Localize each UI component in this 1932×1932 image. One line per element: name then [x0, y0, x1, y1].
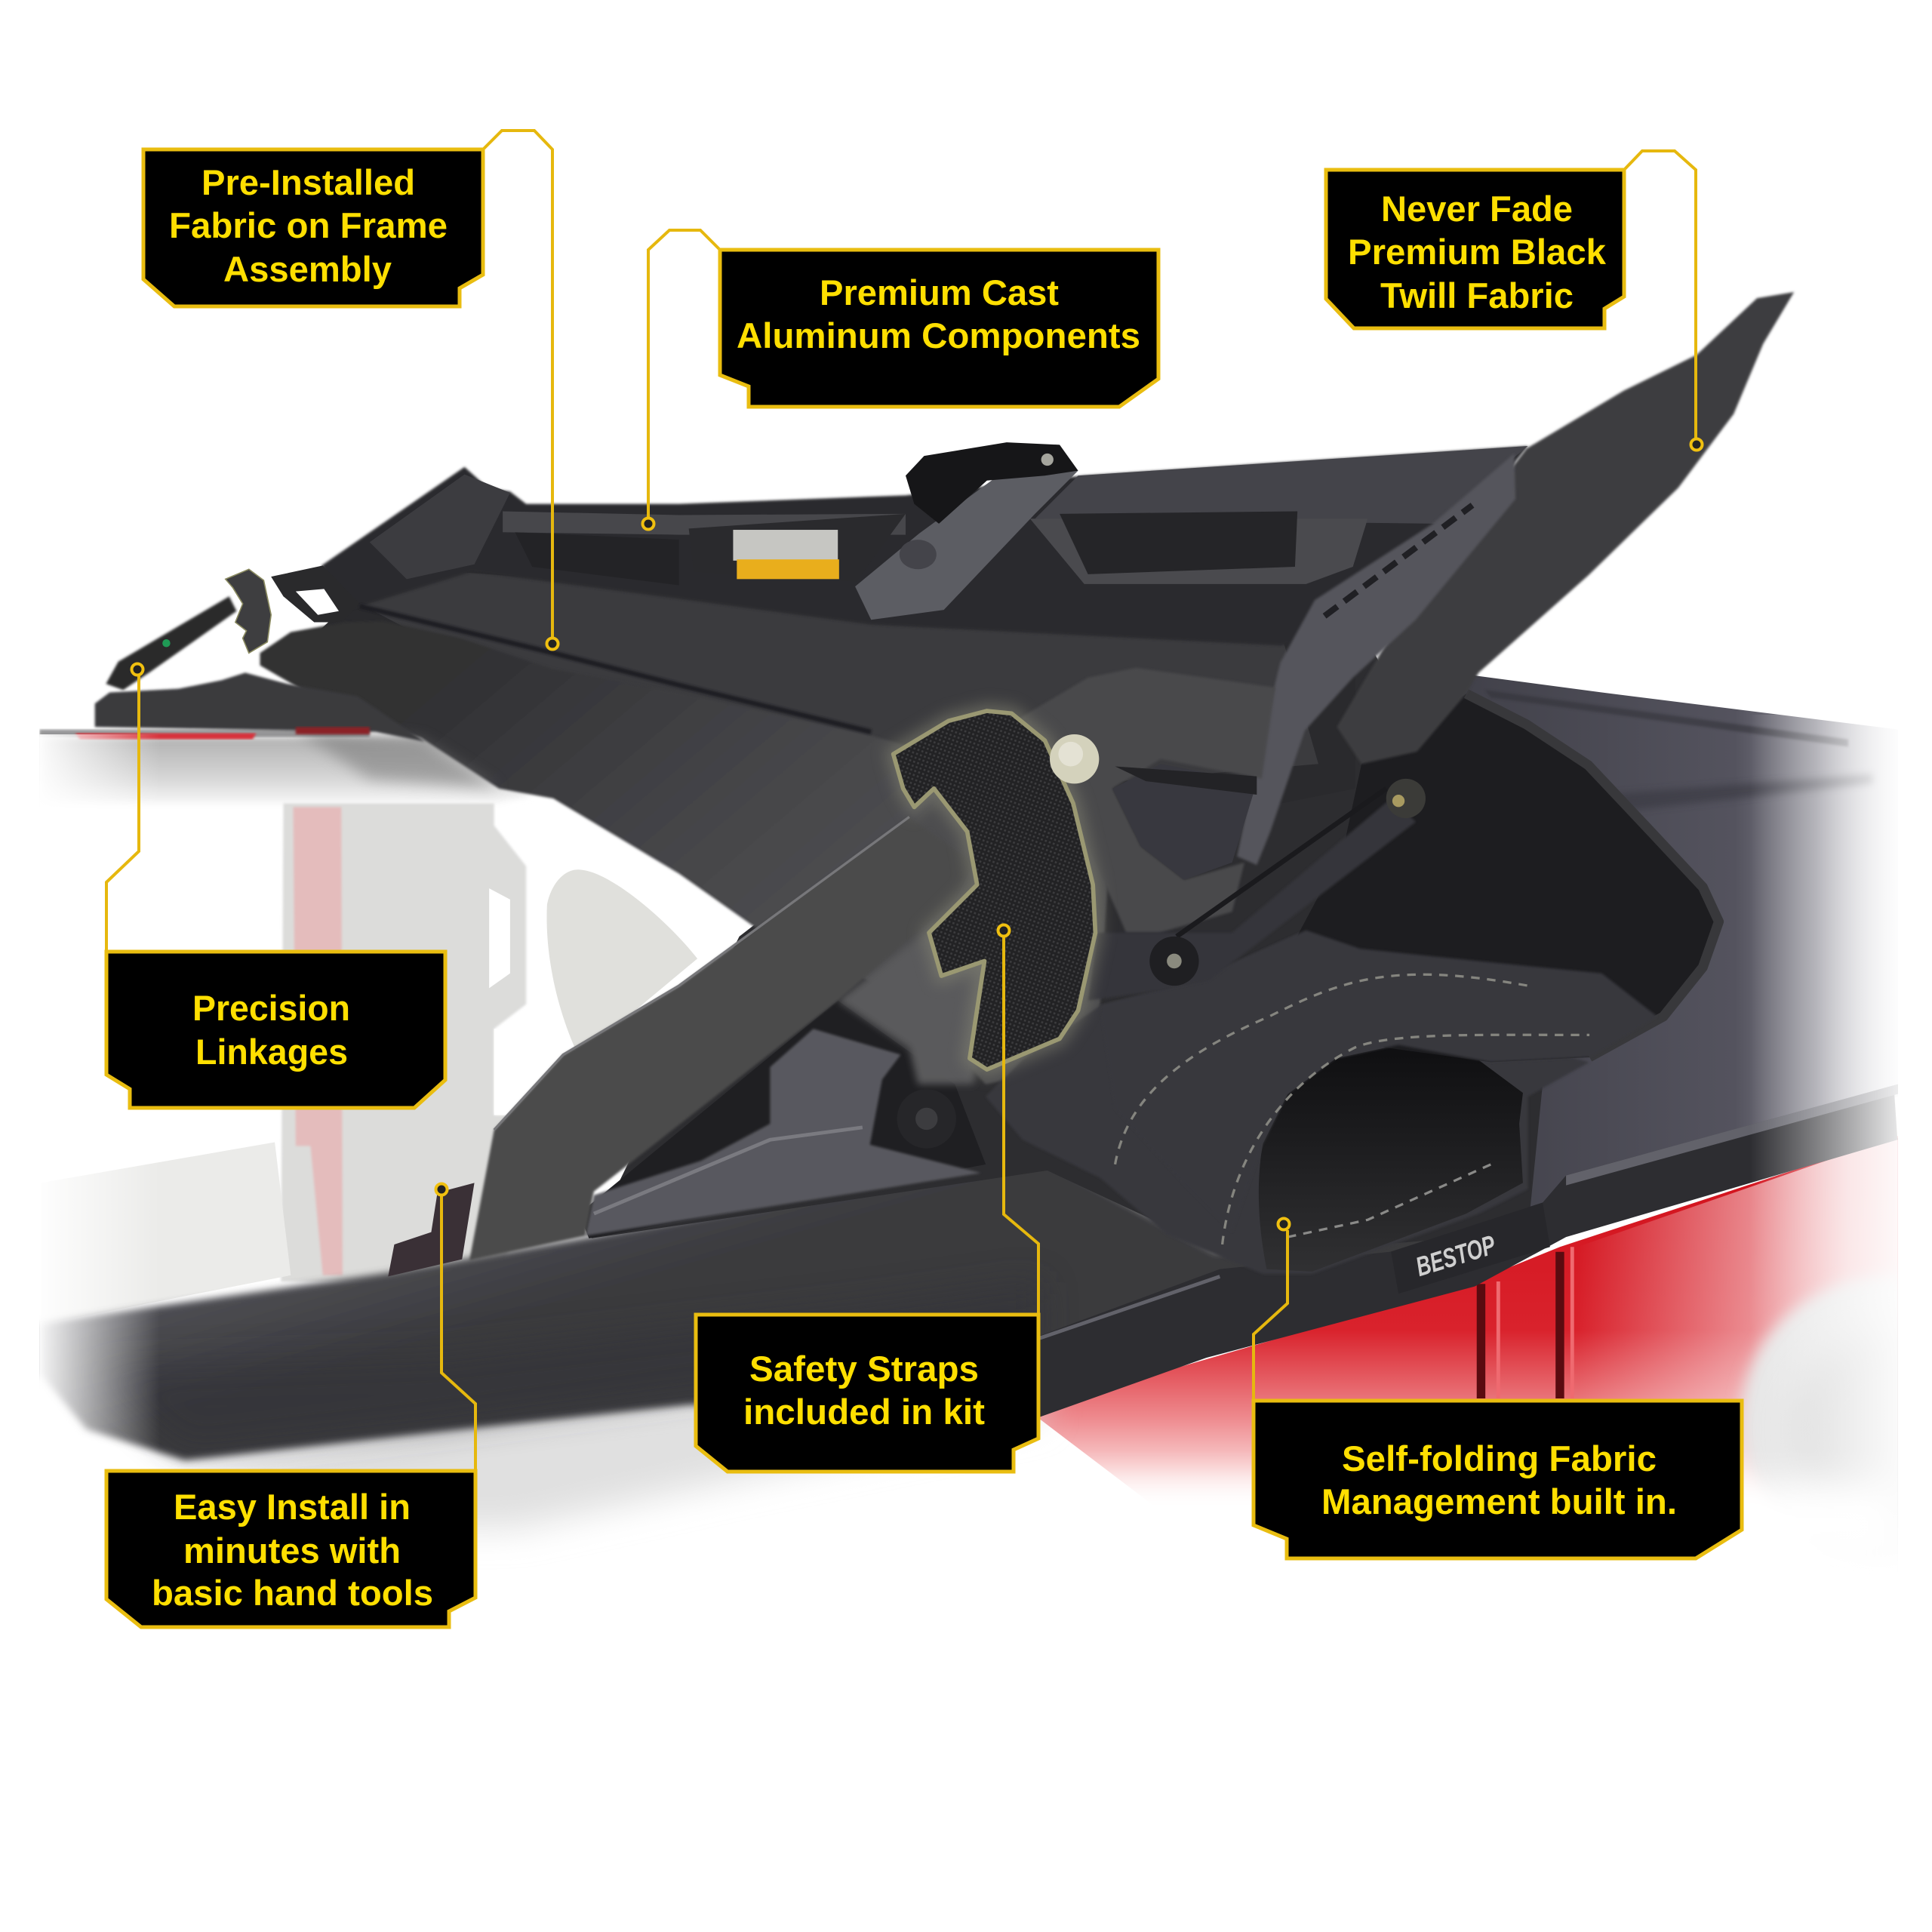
callout: Premium Cast Aluminum Components	[643, 230, 1158, 530]
leader dot	[643, 518, 654, 530]
product label	[733, 530, 839, 579]
red body panels	[1040, 1136, 1897, 1549]
label text	[1348, 189, 1607, 315]
leader dot	[1690, 439, 1703, 450]
label text: Management built in.	[1321, 1481, 1677, 1521]
label box	[143, 149, 483, 306]
side rail	[39, 1155, 1540, 1460]
photo: soft top on red Jeep	[39, 292, 1932, 1585]
soft shadow under roll at left	[296, 730, 499, 789]
label text: minutes with	[183, 1531, 401, 1571]
linkage plate	[1015, 668, 1426, 1001]
Bestop logo plate: BESTOP	[1412, 1229, 1499, 1282]
leader dot	[998, 925, 1010, 936]
fabric fold pocket	[1294, 694, 1719, 1062]
label text: Safety Straps	[749, 1349, 979, 1389]
leader line	[1254, 1230, 1287, 1401]
strap halo	[894, 711, 1095, 1069]
upper second fabric roll	[360, 569, 1318, 789]
Bestop logo plate	[1391, 1202, 1550, 1294]
leader line	[483, 131, 552, 638]
label text: Aluminum Components	[737, 315, 1140, 355]
callout: Safety Straps included in kit	[696, 925, 1038, 1472]
callout: Never Fade Premium Black Twill Fabric	[1326, 151, 1703, 450]
crease between rolls	[360, 606, 871, 732]
label box	[720, 250, 1158, 407]
callout: Precision Linkages	[106, 664, 445, 1108]
leader dot	[131, 664, 143, 675]
leader dot	[546, 638, 558, 649]
strap tube behind arm	[838, 924, 998, 1084]
label text	[1321, 1438, 1677, 1521]
label text: Pre-Installed	[202, 162, 415, 202]
leader line	[106, 675, 139, 952]
label text: Never Fade	[1381, 189, 1573, 229]
label text: included in kit	[743, 1392, 985, 1432]
faded seat	[546, 869, 697, 1057]
label box	[696, 1315, 1038, 1472]
pale strip under rail	[225, 1404, 1060, 1538]
pin	[1050, 734, 1099, 783]
leader line	[441, 1195, 475, 1471]
label text: Self-folding Fabric	[1342, 1438, 1657, 1478]
small distant strap	[226, 569, 271, 653]
leader line	[1624, 151, 1696, 438]
label text	[152, 1487, 433, 1613]
label text: Easy Install in	[174, 1487, 411, 1527]
label text: Linkages	[195, 1032, 348, 1072]
label text: Premium Black	[1348, 232, 1607, 272]
aluminum latch	[855, 442, 1078, 620]
leader dot	[436, 1183, 447, 1195]
right edge fade	[1749, 715, 1897, 1577]
callout: Easy Install in minutes with basic hand tools	[106, 1183, 475, 1627]
label box	[106, 952, 445, 1108]
cast mount bracket	[586, 1029, 981, 1236]
label text	[737, 272, 1140, 355]
label box	[1326, 170, 1624, 328]
rear hard top	[1461, 675, 1884, 1207]
left bracket bolt	[388, 1183, 475, 1276]
main fabric roll	[260, 621, 1109, 1084]
left latch base	[39, 596, 425, 742]
label box	[1254, 1401, 1742, 1558]
label text: Assembly	[223, 249, 392, 289]
label text	[192, 988, 350, 1072]
dark backing behind mechanism	[592, 641, 1552, 1257]
label text: Premium Cast	[820, 272, 1059, 312]
label text: Twill Fabric	[1380, 275, 1574, 315]
dark cavity under arm	[579, 1001, 986, 1238]
callout: Pre-Installed Fabric on Frame Assembly	[143, 131, 558, 649]
label box	[106, 1471, 475, 1627]
stitched fabric band	[1100, 931, 1657, 1244]
label text	[743, 1349, 985, 1432]
leader dot	[1278, 1218, 1289, 1230]
left edge fade	[39, 734, 163, 1585]
safety strap	[894, 711, 1095, 1069]
windshield header bar	[271, 446, 1527, 646]
label text: Fabric on Frame	[169, 205, 448, 245]
dark backing behind fabric rolls	[321, 570, 1294, 654]
label text: Precision	[192, 988, 350, 1028]
lower fabric fold	[987, 1007, 1588, 1274]
label text	[169, 162, 448, 289]
callout: Self-folding Fabric Management built in.	[1254, 1218, 1742, 1558]
arm top edge highlight	[494, 817, 909, 1130]
faded rear cab left side	[39, 737, 579, 1324]
label text: basic hand tools	[152, 1573, 433, 1613]
fabric top flap	[1337, 292, 1794, 764]
bow plate	[1237, 454, 1515, 865]
rail right dark section	[1040, 1084, 1897, 1417]
strap arm plate	[469, 817, 974, 1260]
leader line	[1004, 937, 1038, 1315]
leader line	[648, 230, 720, 518]
